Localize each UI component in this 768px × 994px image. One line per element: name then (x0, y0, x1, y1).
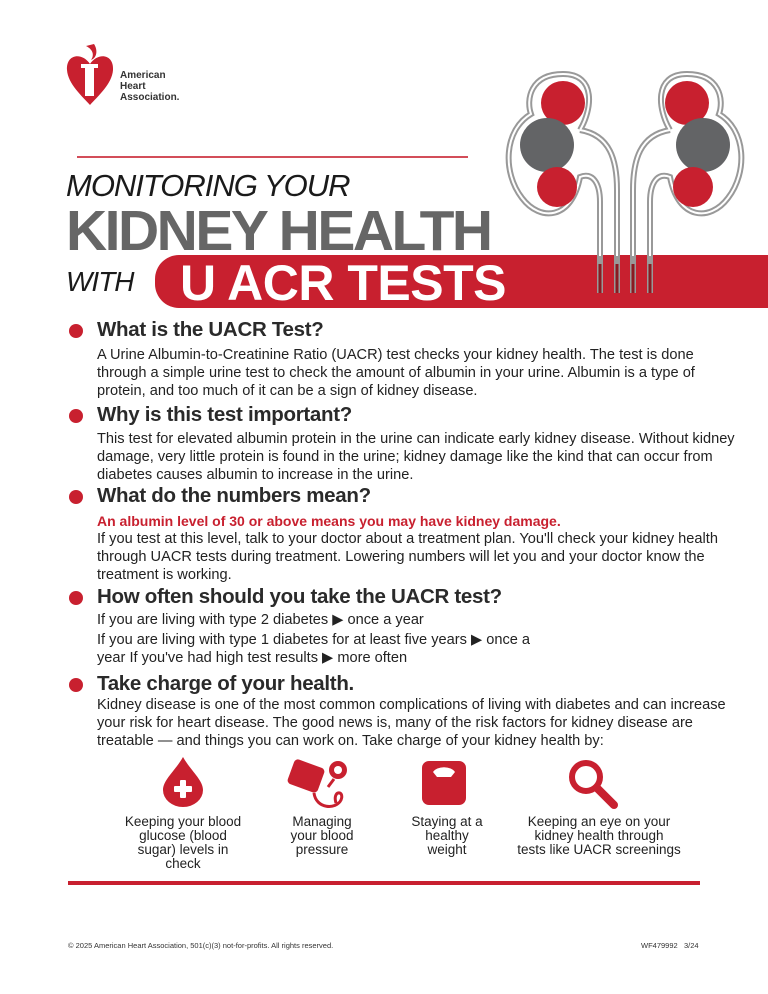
icon: scale (422, 761, 466, 805)
title: WITH (66, 266, 134, 297)
section 4: year If you've had high test results ▶ more often (97, 650, 407, 666)
section 4: If you are living with type 2 diabetes ▶ once a year (97, 612, 424, 628)
text: Keeping an eye on your (528, 814, 670, 829)
text: kidney health through (534, 828, 664, 843)
title: U ACR TESTS (180, 255, 506, 311)
captions: sugar) levels in (138, 842, 228, 857)
icon: magnifier (569, 760, 618, 809)
text: pressure (296, 842, 348, 857)
text: healthy (425, 828, 469, 843)
text: tests like UACR screenings (517, 842, 681, 857)
section 2: This test for elevated albumin protein in the urine can indicate early kidney disease. Without kidney damage, very little protein is found in the urine; kidney damage like the kind that can occur from diabetes causes albumin to increase in the urine. (97, 431, 735, 483)
section 5 (69, 672, 726, 749)
captions: Keeping your blood (125, 814, 241, 829)
footer: © 2025 American Heart Association, 501(c)(3) not-for-profits. All rights reserved. (68, 941, 333, 950)
section 4: How often should you take the UACR test? (97, 585, 502, 608)
section 5: Take charge of your health. (97, 672, 354, 695)
section 1 (69, 318, 695, 399)
logo: Heart (120, 81, 146, 92)
section 3: An albumin level of 30 or above means you may have kidney damage. (97, 513, 561, 529)
logo (66, 44, 179, 105)
divider line (77, 156, 468, 158)
captions: glucose (blood (139, 828, 227, 843)
captions (125, 814, 241, 871)
text: Managing (292, 814, 352, 829)
section 1: A Urine Albumin-to-Creatinine Ratio (UACR) test checks your kidney health. The test is done through a simple urine test to check the amount of albumin in your urine. Albumin is a type of protein, and too much of it can be a sign of kidney disease. (97, 347, 695, 399)
section 3 (69, 484, 718, 583)
title: MONITORING YOUR (66, 168, 350, 203)
logo: American (120, 70, 166, 81)
title: KIDNEY HEALTH (66, 199, 491, 263)
title (66, 168, 768, 311)
section 1: What is the UACR Test? (97, 318, 324, 341)
text: Staying at a (411, 814, 483, 829)
section 2 (69, 403, 735, 483)
section 4 (69, 585, 530, 666)
text: weight (427, 842, 467, 857)
red banner (155, 255, 768, 308)
icon: blood pressure (288, 759, 347, 808)
section 5: Kidney disease is one of the most common complications of living with diabetes and can increase your risk for heart disease. The good news is, many of the risk factors for kidney disease are treatable — and things you can work on. Take charge of your kidney health by: (97, 697, 726, 749)
section 3: What do the numbers mean? (97, 484, 371, 507)
icon: blood drop (163, 757, 203, 807)
text: WF479992 3/24 (641, 941, 699, 950)
section 2: Why is this test important? (97, 403, 352, 426)
section 3: If you test at this level, talk to your doctor about a treatment plan. You'll check your kidney health through UACR tests during treatment. Lowering numbers will let you and your doctor know the treatment is working. (97, 531, 718, 583)
captions: check (165, 856, 201, 871)
bottom rule (68, 881, 700, 885)
text: your blood (290, 828, 354, 843)
kidneys illustration (506, 71, 744, 293)
logo: Association. (120, 92, 179, 103)
section 4: If you are living with type 1 diabetes for at least five years ▶ once a (97, 632, 530, 648)
